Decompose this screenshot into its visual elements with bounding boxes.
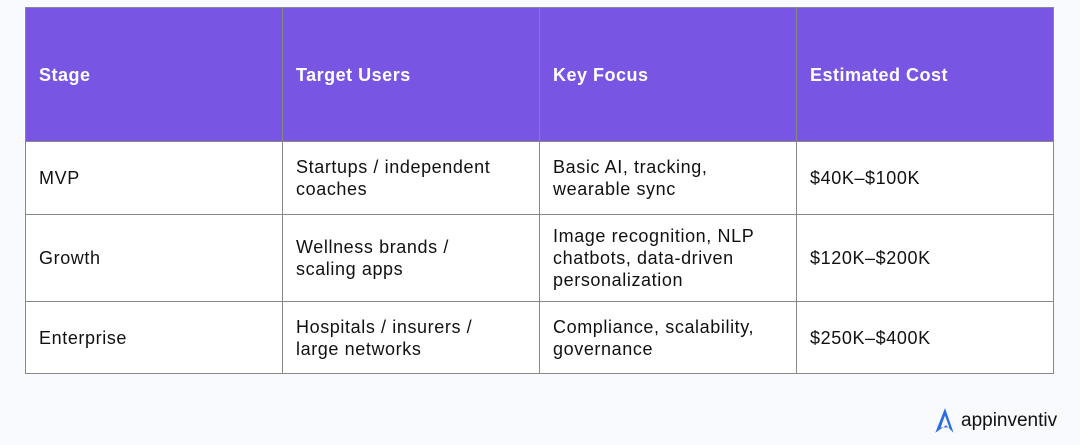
table: personalization	[553, 270, 683, 290]
table: Basic AI, tracking,	[553, 157, 707, 177]
icon: logo mark	[935, 408, 954, 433]
table: Compliance, scalability,	[553, 317, 754, 337]
logo: appinventiv	[935, 408, 1057, 433]
row: Growth: Growth	[39, 248, 101, 268]
table: large networks	[296, 339, 421, 359]
table: Startups / independent	[296, 157, 490, 177]
table: $40K–$100K	[810, 168, 920, 188]
header: Target Users: Target Users	[296, 64, 411, 84]
table: governance	[553, 339, 653, 359]
table: Hospitals / insurers /	[296, 317, 472, 337]
table: Wellness brands /	[296, 237, 449, 257]
header: Estimated Cost: Estimated Cost	[810, 64, 948, 84]
logo: appinventiv: appinventiv	[961, 410, 1057, 431]
table: coaches	[296, 179, 367, 199]
table: scaling apps	[296, 259, 403, 279]
header row	[26, 8, 1053, 141]
table	[25, 7, 1054, 374]
row: Enterprise: Enterprise	[39, 328, 127, 348]
table: Image recognition, NLP	[553, 226, 754, 246]
header: Stage: Stage	[39, 64, 91, 84]
row: MVP: MVP	[39, 168, 80, 188]
table: $250K–$400K	[810, 328, 931, 348]
table: chatbots, data-driven	[553, 248, 734, 268]
table: wearable sync	[553, 179, 676, 199]
table: $120K–$200K	[810, 248, 931, 268]
header: Key Focus: Key Focus	[553, 64, 649, 84]
